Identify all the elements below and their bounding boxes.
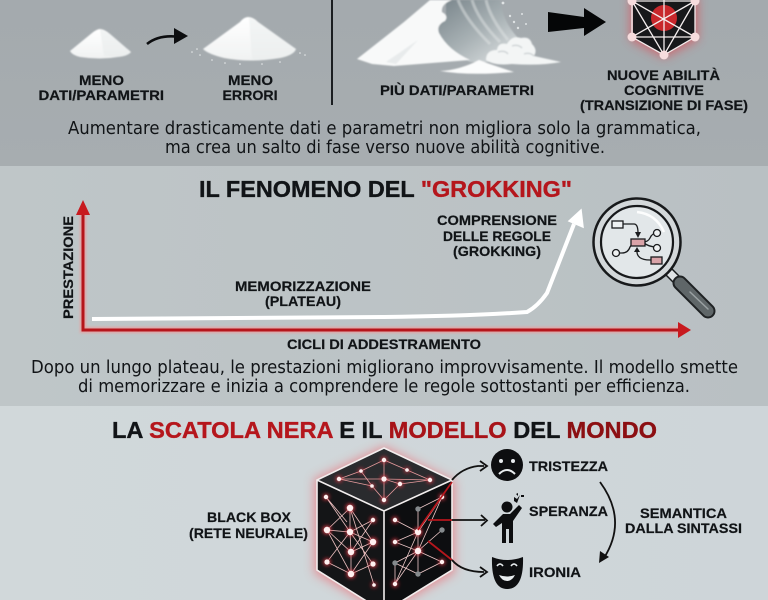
labels: scaling: NUOVE ABILITÀ [607,67,720,83]
label: black box [189,509,308,541]
labels: emotions: IRONIA [529,564,581,580]
text block: scaling summary: Aumentare drasticamente dati e parametri non migliora solo la grammatica, [68,118,701,139]
icon: magnifying glass [594,198,708,311]
label: grokking: COMPRENSIONE [437,212,557,228]
labels: emotions [529,458,608,580]
network: right face [395,497,442,584]
labels: scaling: PIÙ DATI/PARAMETRI [380,81,534,98]
icon: larger pile [191,17,306,65]
label: semantics [625,505,742,536]
labels: emotions: TRISTEZZA [529,458,608,474]
label: plateau: (PLATEAU) [265,293,341,309]
network: top face [339,460,430,500]
panel: scaling [0,0,768,166]
text block: scaling summary: ma crea un salto di fase verso nuove abilità cognitive. [165,137,605,158]
network: left face [326,497,374,585]
label: grokking: (GROKKING) [453,243,541,259]
labels: scaling: MENO [79,72,124,88]
panel: grokking [0,166,768,406]
label: semantics: SEMANTICA [640,505,727,521]
arrow: semantic curve [599,482,615,563]
labels: scaling: ERRORI [222,87,278,103]
text block: scaling summary [68,118,701,158]
icon: theatre mask [492,557,523,589]
axis label: y: PRESTAZIONE [60,216,76,319]
labels: scaling [38,67,748,113]
text block: grokking summary: di memorizzare e inizia a comprendere le regole sottostanti per efficienza. [78,376,690,397]
icon: network crystal [628,0,700,60]
arrows: cube to emotions [418,461,487,577]
text block: grokking summary [31,357,738,397]
labels: scaling: MENO [228,72,273,88]
chart: grokking curve [60,200,691,352]
label: grokking: DELLE REGOLE [443,228,551,244]
arrow: big black [548,8,606,36]
heading: black box: LA SCATOLA NERA E IL MODELLO DEL MONDO [112,417,657,443]
divider [331,0,333,105]
labels: emotions: SPERANZA [529,503,608,519]
labels: scaling: DATI/PARAMETRI [38,87,164,103]
icon: small pile [70,29,131,58]
label: black box: (RETE NEURALE) [189,525,308,541]
label: grokking [437,212,557,259]
labels: scaling: (TRANSIZIONE DI FASE) [580,97,748,113]
label: semantics: DALLA SINTASSI [625,520,742,536]
icon: wave of data [357,0,561,74]
heading: grokking: IL FENOMENO DEL "GROKKING" [199,176,572,202]
arrow: small curved [147,28,188,44]
axis label: x: CICLI DI ADDESTRAMENTO [287,336,481,352]
icon: hopeful person [493,493,524,543]
labels: scaling: COGNITIVE [624,82,704,98]
label: black box: BLACK BOX [207,509,292,525]
label: plateau [235,278,371,309]
label: plateau: MEMORIZZAZIONE [235,278,371,294]
icon: sad face [491,449,523,481]
icon: neural cube [314,446,455,600]
panel: black box [0,406,768,600]
